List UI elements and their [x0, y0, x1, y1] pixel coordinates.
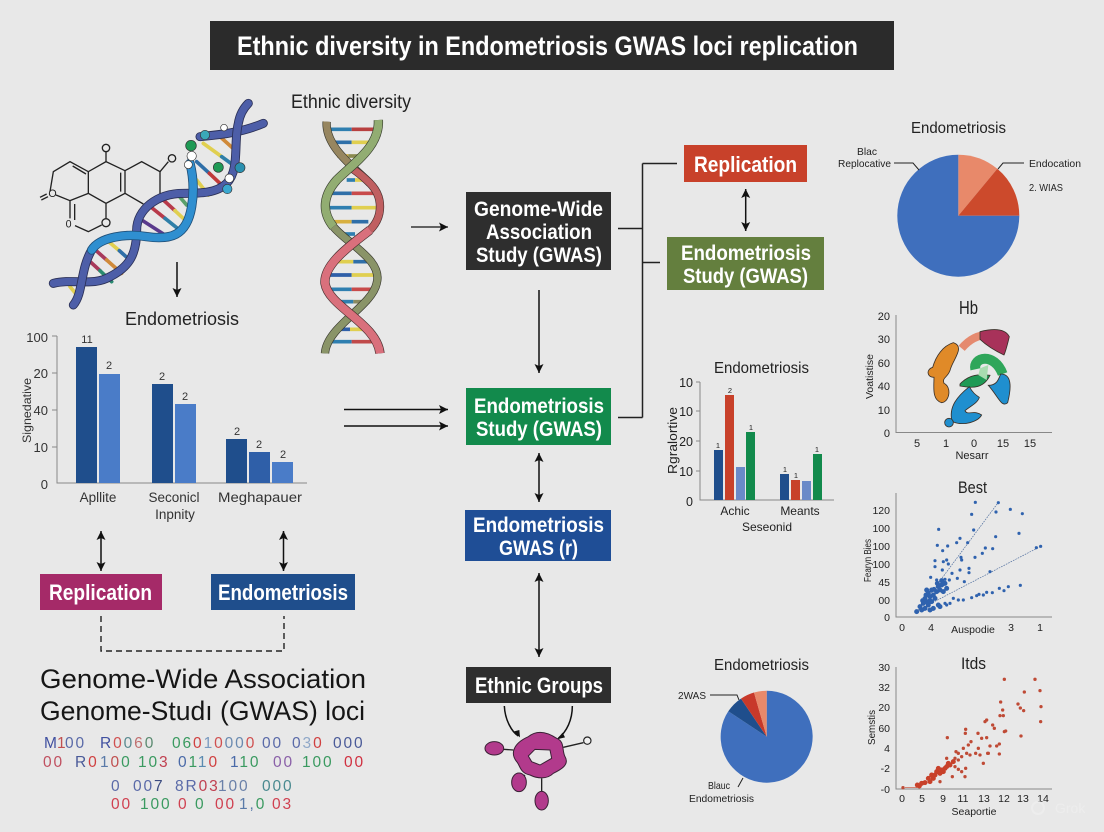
arrow: chart to Endometriosis Study lower	[344, 425, 448, 427]
box: Endometriosis blue: Endometriosis	[218, 580, 348, 605]
text: coloured digit sequences: 0	[195, 796, 206, 813]
chart: Hb with protein ribbon: 20	[878, 311, 890, 323]
text: coloured digit sequences: 010000	[193, 735, 256, 752]
scatter plot: Itds: 13	[1017, 793, 1029, 805]
box: Genome-Wide Association Study: Association	[486, 221, 592, 244]
arrow: chart to Replication	[100, 531, 102, 571]
chart: Hb with protein ribbon: 15	[997, 438, 1009, 450]
arrow: chart to Endometriosis	[282, 531, 284, 571]
bar chart: left: 100	[26, 330, 48, 345]
bar chart: left: 2	[234, 426, 240, 438]
chart: Hb with protein ribbon: 1	[943, 438, 949, 450]
bar chart: middle: 1	[749, 423, 753, 432]
watermark: Grok	[1032, 800, 1086, 816]
scatter plot: Itds: 32	[878, 682, 890, 694]
scatter plot: Itds: Semstis	[867, 710, 878, 745]
chart: Hb with protein ribbon	[864, 311, 1052, 462]
arrow: Replication to Endometriosis Study	[745, 189, 747, 231]
scatter plot: Itds: 13	[978, 793, 990, 805]
icon: molecule structure: O	[48, 188, 57, 200]
scatter plot: Itds: 12	[998, 793, 1010, 805]
scatter plot: Itds: 11	[958, 793, 969, 805]
text: coloured digit sequences: M	[44, 735, 59, 752]
text: coloured digit sequences: 0	[292, 735, 303, 752]
text: coloured digit sequences: 00	[273, 754, 294, 771]
scatter plot: Itds: 0	[899, 793, 905, 805]
scatter plot: Best: 100	[872, 559, 890, 571]
icon: diagonal DNA helix	[53, 103, 263, 305]
text: coloured digit sequences: 8R	[175, 778, 199, 795]
scatter plot: Best: 3	[1008, 622, 1014, 634]
bar chart: middle	[666, 376, 834, 534]
text: coloured digit sequences: 0	[256, 796, 266, 813]
bar chart: left: 0	[41, 477, 48, 492]
arrow: GWAS down to Endometriosis Study	[538, 290, 540, 373]
bar chart: middle: 10	[679, 405, 693, 419]
scatter plot: Best	[863, 493, 1052, 636]
arrow: green box to blue box	[538, 453, 540, 502]
text: coloured digit sequences: 00	[111, 754, 132, 771]
chart: Hb with protein ribbon: 30	[878, 334, 890, 346]
text: coloured digit sequences: 0	[178, 796, 189, 813]
heading: Itds: Itds	[961, 654, 986, 673]
heading: Best: Best	[958, 478, 987, 497]
box: Endometriosis GWAS blue	[465, 510, 611, 561]
arrow: blue box to Ethnic Groups	[538, 573, 540, 657]
text: coloured digit sequences: 1	[100, 754, 111, 771]
bar chart: middle: Meants	[780, 504, 820, 518]
text: coloured digit sequences: 03	[199, 778, 220, 795]
bar chart: left: 2	[159, 371, 165, 383]
title: Ethnic diversity in Endometriosis GWAS loci replication	[237, 31, 858, 61]
text: coloured digit sequences: 1	[57, 735, 68, 752]
title	[210, 21, 894, 70]
scatter plot: Best: Auspodie	[951, 624, 995, 636]
heading: lower pie Endometriosis: Endometriosis	[714, 657, 809, 674]
bar chart: left: Apllite	[80, 490, 116, 505]
pie chart: lower	[678, 690, 813, 805]
text: coloured digit sequences: 3	[159, 754, 170, 771]
bar chart: middle: 2	[728, 386, 732, 395]
bar chart: middle: 0	[686, 495, 693, 509]
scatter plot: Best: 120	[872, 505, 890, 517]
heading: Ethnic diversity: Ethnic diversity	[291, 92, 411, 113]
pie chart: upper: Endocation	[1029, 158, 1081, 170]
chart: Hb with protein ribbon: Voatistise	[864, 354, 876, 399]
text: coloured digit sequences: 0	[88, 754, 99, 771]
text: coloured digit sequences: 7	[154, 778, 165, 795]
text: coloured digit sequences: 00	[111, 796, 132, 813]
text: coloured digit sequences: 0060	[113, 735, 155, 752]
chart: Hb with protein ribbon: Nesarr	[955, 450, 989, 462]
scatter plot: Itds: -0	[881, 784, 890, 796]
bar chart: middle: Rgralortive	[666, 407, 680, 474]
text: coloured digit sequences: 0	[111, 778, 122, 795]
text: coloured digit sequences: 00	[262, 735, 283, 752]
text: coloured digit sequences: 10	[138, 754, 159, 771]
bar chart: left: Seconicl	[148, 490, 200, 505]
scatter plot: Best: Fearyn Bies	[863, 539, 874, 582]
chart: Hb with protein ribbon: 15	[1024, 438, 1036, 450]
pie chart: upper	[838, 146, 1081, 277]
chart: Hb with protein ribbon: 10	[878, 405, 890, 417]
bar chart: left: 2	[256, 439, 262, 451]
box: Genome-Wide Association Study: Genome-Wide	[474, 198, 603, 221]
bar chart: left	[20, 330, 307, 522]
text: coloured digit sequences: 1	[230, 754, 239, 771]
box: Genome-Wide Association Study	[466, 192, 611, 270]
pie chart: upper: Replocative	[838, 158, 891, 170]
box: Endometriosis Study green: Endometriosis	[474, 395, 604, 418]
box: Endometriosis Study olive: Study (GWAS)	[683, 265, 808, 288]
bar chart: left: 2	[106, 360, 112, 372]
box: Replication red	[684, 145, 807, 182]
text: coloured digit sequences: 100	[218, 778, 250, 795]
bar chart: left: 2	[182, 391, 188, 403]
chart: Hb with protein ribbon: 0	[971, 438, 977, 450]
arrow: helix to GWAS	[411, 226, 448, 228]
scatter plot: Itds: 20	[878, 702, 890, 714]
text: coloured digit sequences: R	[75, 754, 88, 771]
text: coloured digit sequences: 10	[239, 754, 260, 771]
bar chart: middle: 10	[679, 376, 693, 390]
scatter plot: Itds	[867, 662, 1052, 818]
text: coloured digit sequences: 06	[172, 735, 193, 752]
pie chart: upper: Blac	[857, 146, 877, 158]
watermark: Grok: Grok	[1055, 800, 1086, 816]
text: coloured digit sequences: 100	[302, 754, 334, 771]
text: Genome-Wide Association loci	[40, 664, 366, 726]
heading: Hb: Hb	[959, 298, 978, 318]
scatter plot: Itds: 5	[919, 793, 925, 805]
icon: ethnic groups molecule	[485, 706, 591, 810]
scatter plot: Best: 00	[878, 595, 890, 607]
scatter plot: Best: 0	[884, 612, 890, 624]
bar chart: middle: Seseonid	[742, 520, 792, 534]
text: coloured digit sequences: 00	[133, 778, 154, 795]
dashed connector	[101, 616, 284, 651]
icon: molecule structure: 0	[66, 218, 72, 230]
scatter plot: Best: 1	[1037, 622, 1043, 634]
scatter plot: Best: 4	[928, 622, 934, 634]
bar chart: middle: 20	[679, 435, 693, 449]
box: Replication red: Replication	[694, 152, 797, 177]
scatter plot: Best: 0	[899, 622, 905, 634]
scatter plot: Best: 100	[872, 541, 890, 553]
box: Endometriosis Study green: Study (GWAS)	[476, 418, 602, 441]
bar chart: left: 11	[81, 334, 93, 346]
box: Genome-Wide Association Study: Study (GWAS)	[476, 244, 602, 267]
box: Endometriosis blue	[211, 574, 355, 610]
bar chart: middle: 1	[783, 465, 787, 474]
box: Replication magenta: Replication	[49, 580, 152, 605]
scatter plot: Itds: -2	[881, 763, 890, 775]
bar chart: left: Meghapauer	[218, 490, 303, 505]
pie chart: upper: 2. WIAS	[1029, 182, 1063, 194]
box: Ethnic Groups	[466, 667, 611, 703]
scatter plot: Itds: 14	[1037, 793, 1049, 805]
scatter plot: Best: 100	[872, 523, 890, 535]
box: Endometriosis GWAS blue: GWAS (r)	[499, 537, 578, 560]
icon: vertical DNA helix	[325, 120, 380, 353]
bar chart: middle: Achic	[720, 504, 750, 518]
text: coloured digit sequences: 0	[178, 754, 189, 771]
text: Genome-Wide Association loci: Genome-Studı (GWAS) loci	[40, 696, 365, 726]
chart: Hb with protein ribbon: 40	[878, 381, 890, 393]
bar chart: middle: 1	[794, 471, 798, 480]
scatter plot: Itds: 60	[878, 723, 890, 735]
scatter plot: Best: 45	[878, 577, 890, 589]
text: coloured digit sequences: R	[100, 735, 113, 752]
pie chart: lower: 2WAS	[678, 690, 706, 702]
text: coloured digit sequences: 000	[262, 778, 294, 795]
scatter plot: Itds: Seaportie	[952, 806, 997, 818]
chart: Hb with protein ribbon: 5	[914, 438, 920, 450]
box: Endometriosis Study green	[466, 388, 611, 445]
bar chart: middle: 10	[679, 465, 693, 479]
text: coloured digit sequences: 03	[272, 796, 293, 813]
chart: Hb with protein ribbon: 60	[878, 358, 890, 370]
bar chart: left: 10	[34, 440, 48, 455]
bar chart: middle: 1	[815, 445, 819, 454]
bar chart: left: 2	[280, 449, 286, 461]
text: coloured digit sequences: 00	[344, 754, 365, 771]
heading: upper pie Endometriosis: Endometriosis	[911, 120, 1006, 137]
text: coloured digit sequences: 00	[215, 796, 236, 813]
text: coloured digit sequences: 00	[43, 754, 64, 771]
text: coloured digit sequences: 110	[189, 754, 219, 771]
connector: bracket to right boxes	[618, 164, 677, 418]
text: coloured digit sequences	[43, 735, 365, 813]
box: Endometriosis GWAS blue: Endometriosis	[473, 514, 604, 537]
pie chart: lower: Endometriosis	[689, 793, 754, 805]
heading: Endometriosis: Endometriosis	[125, 309, 239, 329]
text: coloured digit sequences: 1,	[239, 796, 256, 813]
pie chart: lower: Blauc	[708, 780, 730, 792]
box: Ethnic Groups: Ethnic Groups	[475, 673, 603, 698]
bar chart: left: Inpnity	[155, 507, 195, 522]
bar chart: left: 40	[34, 403, 48, 418]
bar chart: left: 20	[34, 366, 48, 381]
box: Replication magenta	[40, 574, 162, 610]
text: coloured digit sequences: 100	[140, 796, 172, 813]
arrow: helix down to Endometriosis	[176, 262, 178, 297]
box: Endometriosis Study olive: Endometriosis	[681, 242, 811, 265]
text: coloured digit sequences: 30	[303, 735, 324, 752]
chart: Hb with protein ribbon: 0	[884, 428, 890, 440]
bar chart: left: Signedative	[20, 378, 34, 443]
box: Endometriosis Study olive	[667, 237, 824, 290]
heading: bar chart Endometriosis: Endometriosis	[714, 360, 809, 377]
icon: molecule structure	[40, 144, 176, 232]
arrow: chart to Endometriosis Study upper	[344, 408, 448, 410]
text: coloured digit sequences: 00	[65, 735, 86, 752]
scatter plot: Itds: 4	[884, 743, 890, 755]
text: Genome-Wide Association loci: Genome-Wide Association	[40, 664, 366, 694]
bar chart: middle: 1	[716, 441, 720, 450]
scatter plot: Itds: 9	[940, 793, 946, 805]
scatter plot: Itds: 30	[878, 662, 890, 674]
text: coloured digit sequences: 000	[333, 735, 365, 752]
